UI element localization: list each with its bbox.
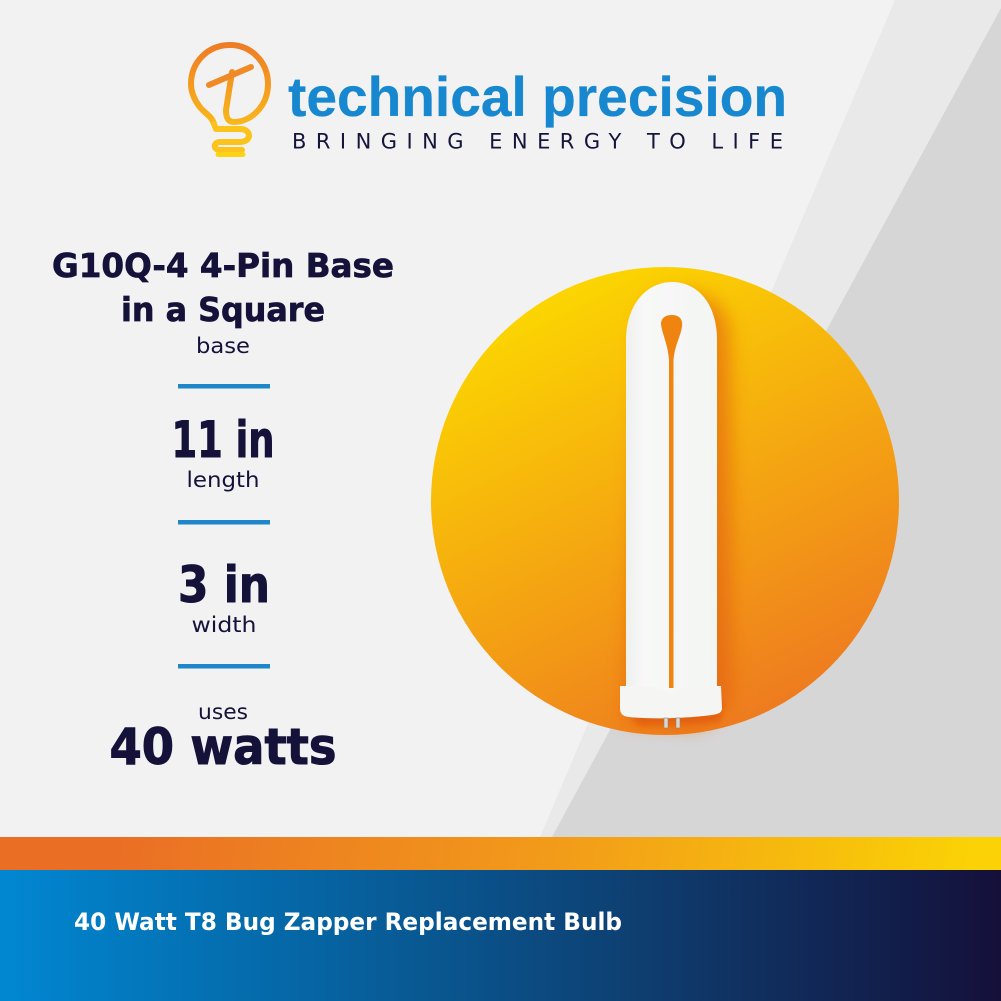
divider — [178, 520, 270, 524]
bulb base shadow — [622, 700, 724, 726]
tagline: BRINGING ENERGY TO LIFE — [292, 130, 783, 154]
spec: watts: 40 watts — [110, 718, 336, 776]
spec: watts: uses — [198, 700, 248, 724]
footer title: 40 Watt T8 Bug Zapper Replacement Bulb — [74, 908, 622, 936]
spec: length — [172, 411, 274, 492]
orange band — [0, 837, 1001, 870]
divider — [178, 384, 270, 388]
spec: base: base — [196, 334, 250, 358]
bulb shadow — [625, 292, 732, 728]
spec: base: in a Square — [121, 290, 325, 329]
orange circle — [431, 267, 899, 735]
spec: length: 11 in — [172, 411, 274, 469]
spec: base — [52, 246, 394, 358]
blue footer band — [0, 870, 1001, 1001]
spec: length: length — [186, 468, 260, 492]
logo — [191, 45, 787, 154]
wordmark: technical precision — [288, 65, 787, 128]
bulb base — [620, 686, 722, 718]
icon: light bulb logo — [191, 45, 268, 154]
spec: width — [178, 556, 270, 637]
pins — [664, 718, 680, 728]
spec: base: G10Q-4 4-Pin Base — [52, 246, 394, 285]
bulb photo — [620, 282, 732, 728]
bulb tubes — [626, 282, 717, 692]
gap between tubes — [661, 315, 682, 688]
spec: width: width — [192, 613, 256, 637]
spec: width: 3 in — [178, 556, 270, 614]
divider — [178, 664, 270, 668]
